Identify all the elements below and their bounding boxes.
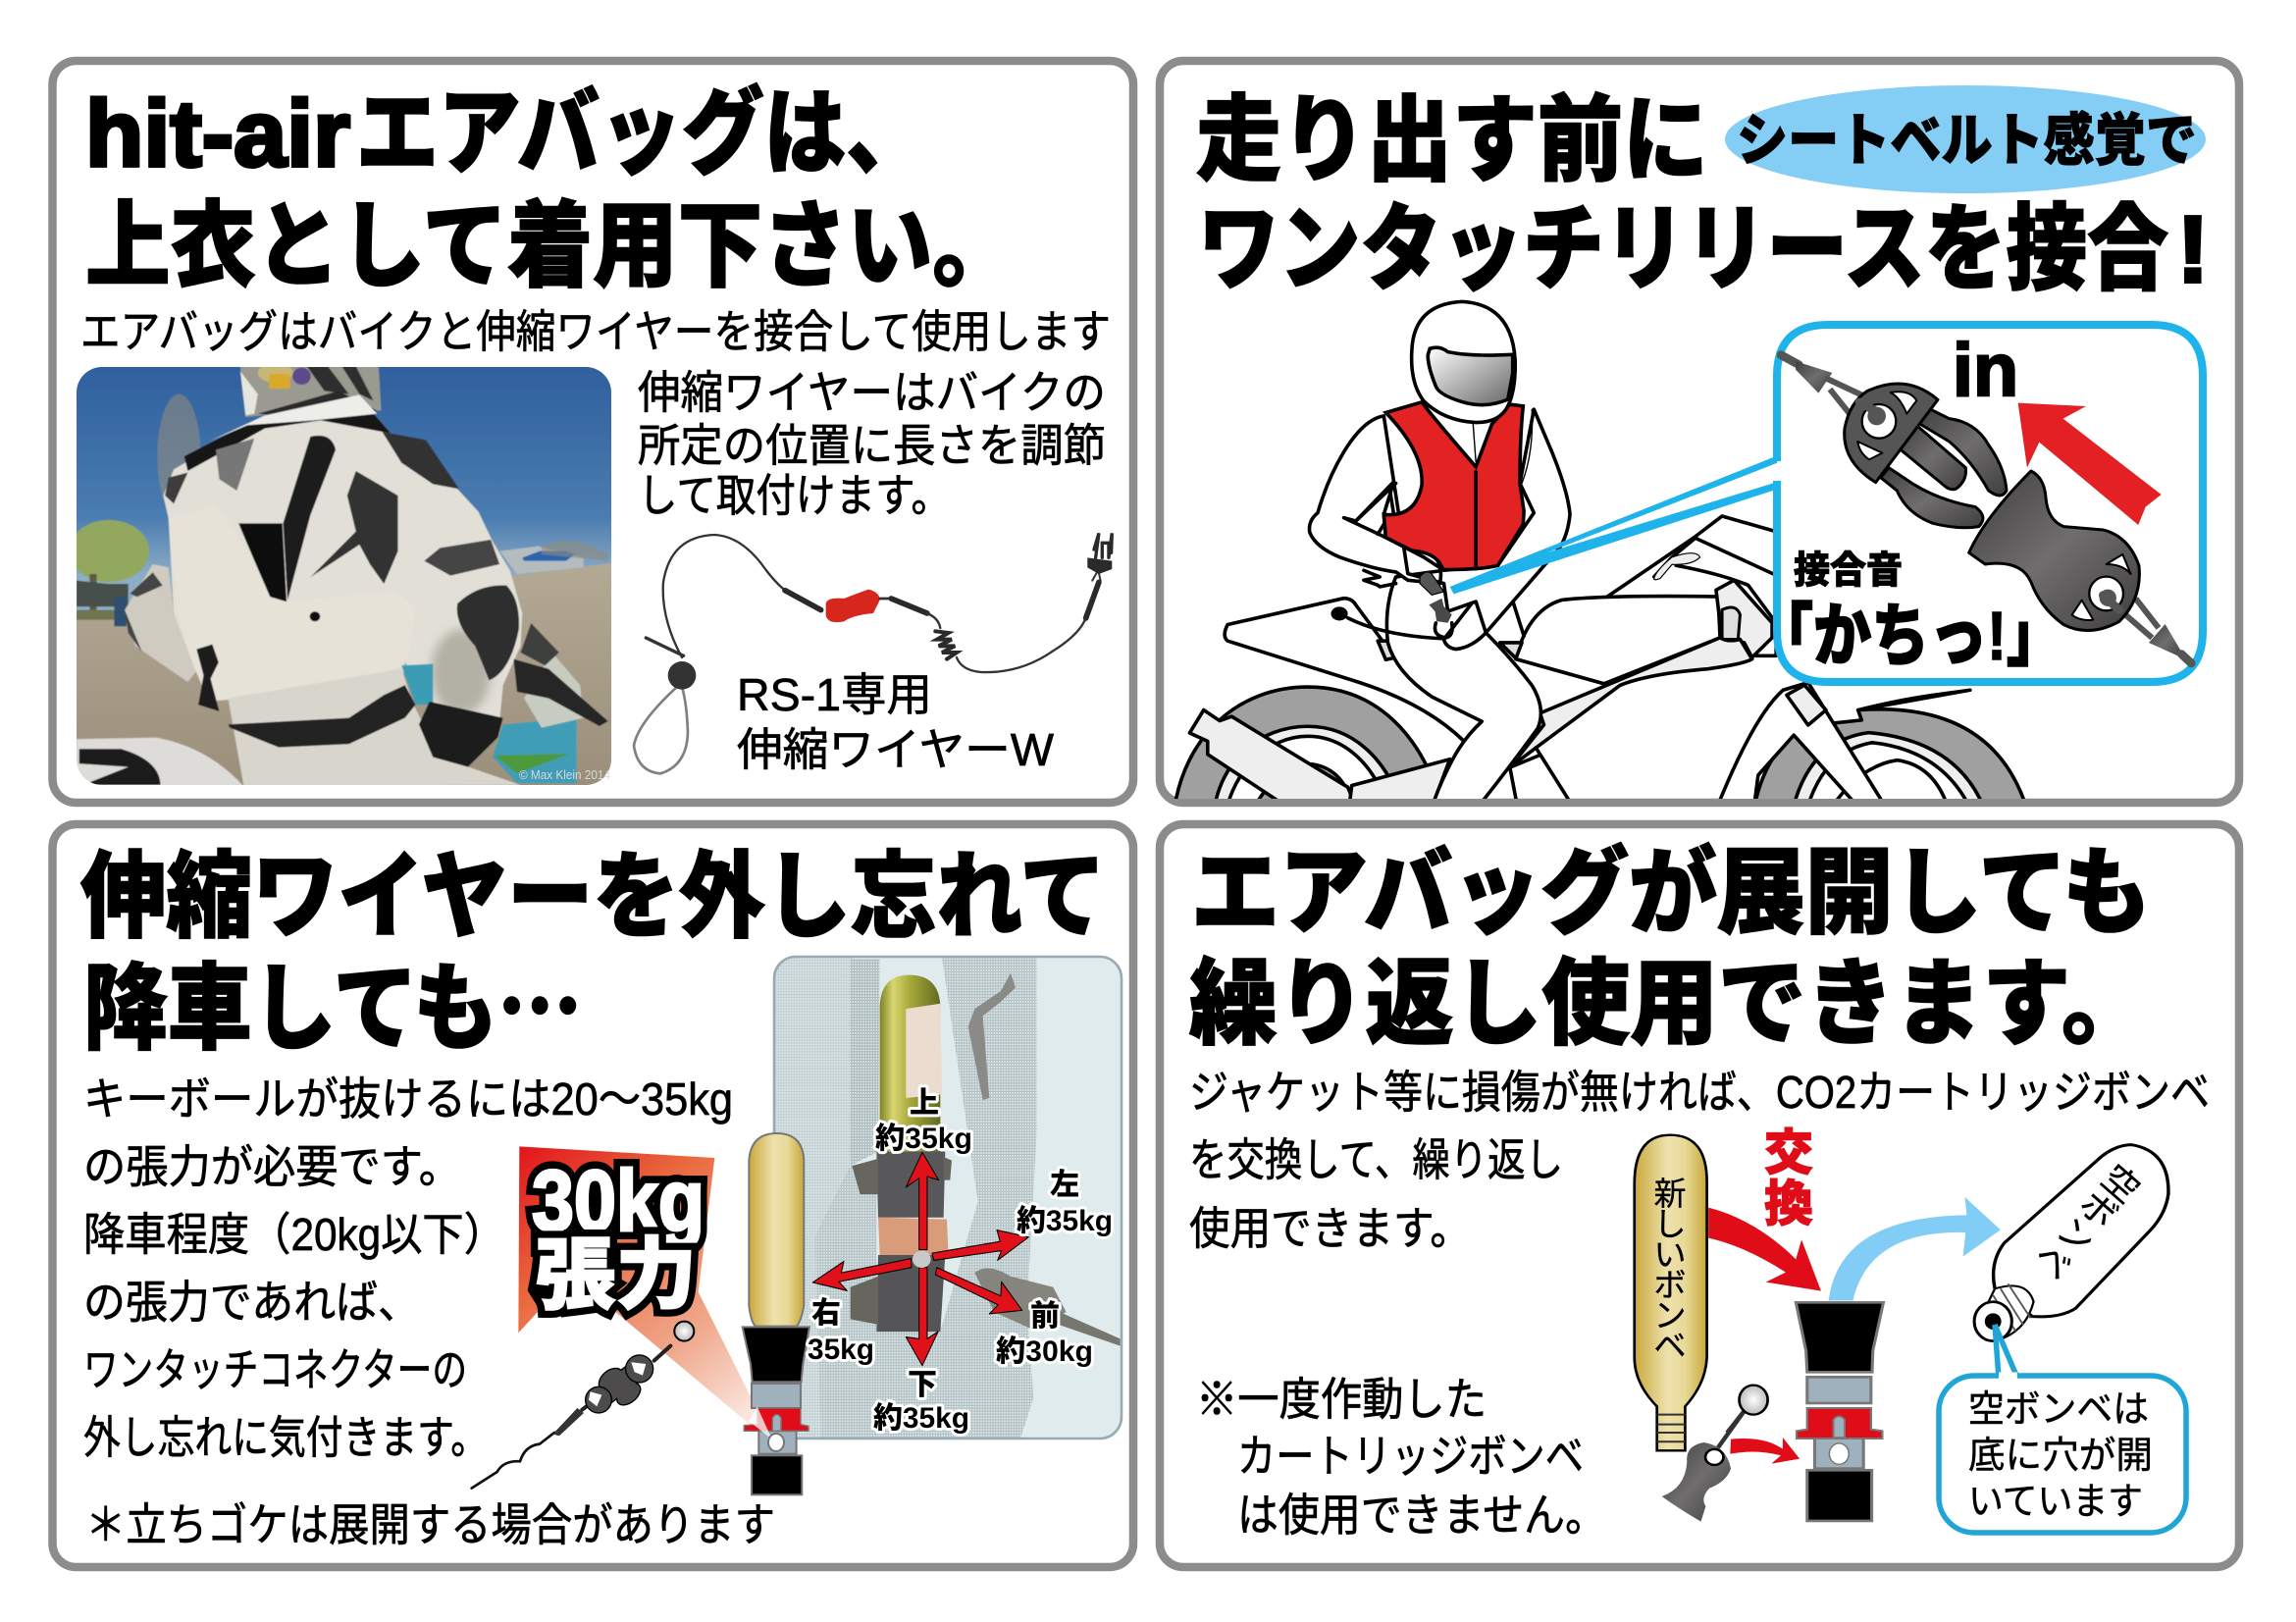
direction labels: 約30kg bbox=[996, 1335, 1093, 1368]
direction labels: 右 bbox=[811, 1297, 841, 1330]
note: は使用できません。 bbox=[1237, 1490, 1606, 1541]
empty cartridge: 空ボンベ bbox=[2026, 1157, 2147, 1288]
airbag vest bbox=[1383, 402, 1524, 570]
text: wire instructions: 所定の位置に長さを調節 bbox=[638, 420, 1106, 471]
body text: キーボールが抜けるには20～35kg bbox=[83, 1073, 733, 1125]
heading: 上衣として着用下さい。 bbox=[85, 194, 1018, 299]
body text: 使用できます。 bbox=[1189, 1203, 1471, 1254]
direction labels: 上 bbox=[910, 1087, 939, 1120]
heading: ! bbox=[2177, 197, 2209, 302]
direction labels bbox=[808, 1087, 1113, 1435]
small connector with key ball bbox=[1662, 1386, 1768, 1522]
badge: 30kg tension: 30kg bbox=[532, 1152, 704, 1249]
callout: bottom hole: 空ボンベは bbox=[1968, 1389, 2149, 1431]
small connector in hand bbox=[1420, 572, 1452, 623]
rider body bbox=[1309, 409, 1570, 802]
illustration: rider on motorcycle bbox=[1174, 301, 2026, 813]
heading: ワンタッチリリースを接合 bbox=[1198, 197, 2168, 302]
callout: bottom hole: 底に穴が開 bbox=[1968, 1436, 2153, 1477]
panel: reusable after deployment bbox=[1160, 824, 2239, 1567]
key ball bbox=[768, 1434, 784, 1451]
fairing and tank bbox=[1500, 516, 1776, 799]
body text: 外し忘れに気付きます。 bbox=[83, 1412, 488, 1463]
heading bbox=[80, 845, 1106, 1069]
blue arrow: remove old bbox=[1829, 1197, 2001, 1300]
note bbox=[1196, 1374, 1606, 1541]
new cartridge bbox=[1635, 1135, 1707, 1450]
direction labels: 左 bbox=[1050, 1169, 1079, 1201]
wire product label bbox=[737, 669, 1055, 775]
panel frame bbox=[53, 61, 1133, 803]
wire with connected buckle bbox=[472, 1322, 694, 1489]
badge: 30kg tension: 30kg bbox=[532, 1152, 704, 1249]
"in" label: in bbox=[1953, 329, 2018, 412]
badge: 30kg tension bbox=[532, 1152, 704, 1319]
photo credit: © Max Klein 2014 bbox=[519, 767, 610, 782]
inflator diagram bbox=[743, 1133, 809, 1494]
gradient callout beam bbox=[518, 1146, 775, 1445]
inset frame bbox=[1777, 325, 2203, 682]
body text: の張力が必要です。 bbox=[83, 1141, 461, 1192]
callout: bottom hole bbox=[1939, 1325, 2186, 1533]
seat tail bbox=[1225, 599, 1487, 741]
text: wire instructions: 伸縮ワイヤーはバイクの bbox=[638, 367, 1106, 418]
text: wire instructions bbox=[638, 367, 1106, 521]
panel: forgot to detach wire bbox=[53, 824, 1133, 1567]
sound label: 接合音 bbox=[1794, 550, 1903, 592]
badge: 30kg tension: 張力 bbox=[535, 1231, 697, 1319]
panel frame bbox=[53, 824, 1133, 1567]
heading: hit-air bbox=[85, 81, 350, 186]
photo: rider wearing airbag vest from behind bbox=[69, 358, 629, 797]
rear wheel bbox=[1174, 685, 1428, 799]
exchange label: 交換 bbox=[1764, 1125, 1813, 1231]
heading: 走り出す前に bbox=[1196, 88, 1708, 193]
subheading text: エアバッグはバイクと伸縮ワイヤーを接合して使用します bbox=[80, 306, 1111, 357]
direction labels: 約35kg bbox=[1017, 1205, 1113, 1237]
badge: seat-belt feel: シートベルト感覚で bbox=[1737, 109, 2197, 173]
wire product label: 伸縮ワイヤーW bbox=[737, 724, 1055, 775]
heading bbox=[1196, 88, 2209, 302]
badge: seat-belt feel bbox=[1725, 85, 2206, 193]
empty cartridge bbox=[1974, 1145, 2168, 1341]
heading: 伸縮ワイヤーを外し忘れて bbox=[80, 845, 1106, 950]
text: wire instructions: して取付けます。 bbox=[638, 470, 951, 521]
note: ※一度作動した bbox=[1196, 1374, 1487, 1425]
new cartridge: 新しいボンベ bbox=[1654, 1176, 1686, 1364]
tension direction arrows bbox=[812, 1152, 1028, 1366]
beam tip over inflator bbox=[749, 1406, 772, 1439]
body text bbox=[83, 1073, 733, 1463]
inset: connector close-up bbox=[1755, 325, 2203, 682]
heading: エアバッグが展開しても bbox=[1191, 841, 2151, 946]
heading: 繰り返し使用できます。 bbox=[1189, 952, 2150, 1057]
panel: connect one-touch release bbox=[1160, 61, 2239, 813]
small red arrow bbox=[1730, 1438, 1800, 1464]
red arrow bbox=[2018, 403, 2162, 525]
direction labels: 下 bbox=[908, 1369, 937, 1401]
inflator diagram bbox=[1796, 1302, 1883, 1521]
body text: の張力であれば、 bbox=[83, 1277, 420, 1328]
direction labels: 約35kg bbox=[875, 1123, 972, 1155]
footnote: ＊立ちゴケは展開する場合があります bbox=[85, 1499, 775, 1550]
red arrow: insert new bbox=[1708, 1208, 1821, 1291]
wire product label: RS-1専用 bbox=[737, 669, 932, 720]
sound label: 「かちっ!」 bbox=[1755, 598, 2064, 674]
direction labels: 約35kg bbox=[873, 1402, 969, 1435]
body text: を交換して、繰り返し bbox=[1189, 1134, 1563, 1185]
panel frame bbox=[1160, 824, 2239, 1567]
badge: 30kg tension: 張力 bbox=[535, 1231, 697, 1319]
female connector bbox=[1781, 355, 2007, 528]
body text: ワンタッチコネクターの bbox=[83, 1344, 467, 1395]
body text bbox=[1189, 1067, 2210, 1254]
note: カートリッジボンベ bbox=[1237, 1431, 1584, 1482]
direction labels: 35kg bbox=[808, 1334, 874, 1366]
callout pointer bbox=[1450, 455, 1778, 594]
swingarm bbox=[1189, 710, 1354, 802]
heading: 降車しても… bbox=[83, 932, 582, 1069]
male connector bbox=[1969, 471, 2191, 663]
direction labels: 前 bbox=[1030, 1300, 1060, 1333]
heading bbox=[85, 81, 1018, 299]
heading: エアバッグは、 bbox=[356, 81, 928, 186]
photo: extension wire with red buckle bbox=[634, 533, 1112, 773]
sound label bbox=[1755, 550, 2064, 674]
body text: 降車程度（20kg以下） bbox=[83, 1209, 505, 1260]
callout: bottom hole: いています bbox=[1968, 1482, 2143, 1523]
panel: wear as outer layer bbox=[53, 61, 1133, 803]
heading bbox=[1189, 841, 2151, 1057]
front wheel and fork bbox=[1719, 683, 2026, 806]
panel frame bbox=[1160, 61, 2239, 803]
helmet bbox=[1412, 301, 1515, 423]
photo: inflator inside jacket bbox=[774, 957, 1122, 1439]
